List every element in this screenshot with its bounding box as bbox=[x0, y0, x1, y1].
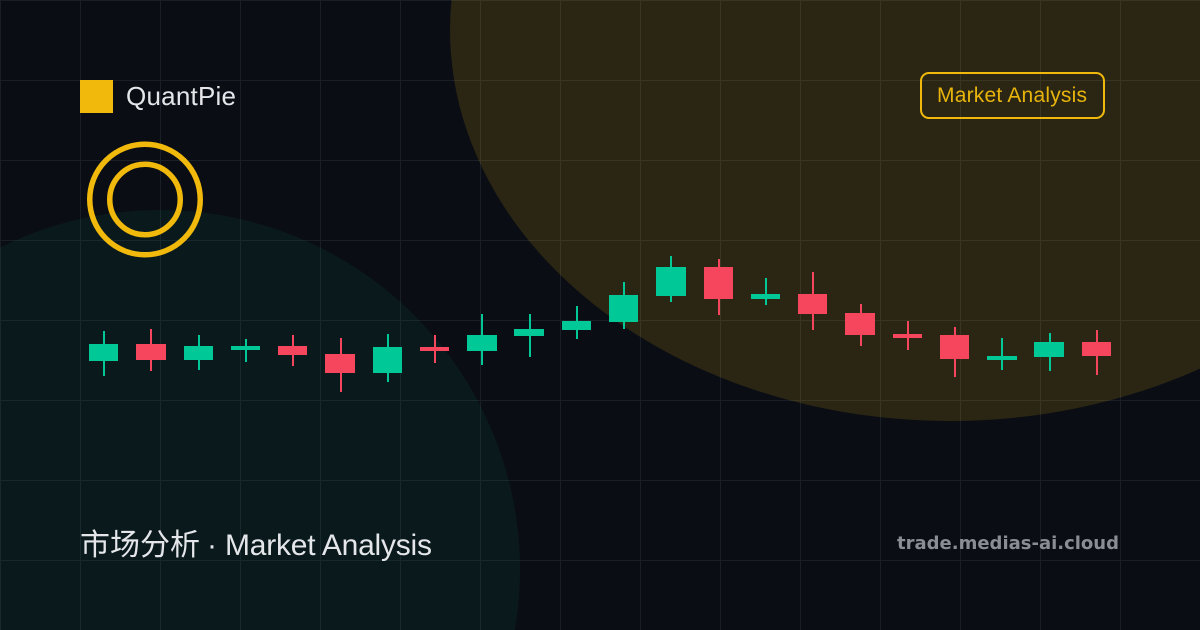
badge: Market Analysis bbox=[921, 73, 1104, 118]
title: 市场分析 bbox=[80, 520, 200, 564]
candlestick chart bbox=[89, 256, 1111, 392]
badge: Market Analysis: Market Analysis bbox=[937, 84, 1087, 107]
background: yellow ellipse bbox=[450, 0, 1200, 421]
site url: trade.medias-ai.cloud bbox=[897, 533, 1119, 554]
logo bbox=[80, 80, 236, 113]
title: Market Analysis bbox=[225, 529, 432, 562]
title bbox=[80, 520, 432, 564]
logo name: QuantPie bbox=[126, 81, 236, 111]
icon: concentric rings bbox=[90, 144, 200, 255]
background: green circle bbox=[0, 210, 520, 630]
title: · bbox=[207, 529, 217, 562]
logo mark bbox=[80, 80, 113, 113]
